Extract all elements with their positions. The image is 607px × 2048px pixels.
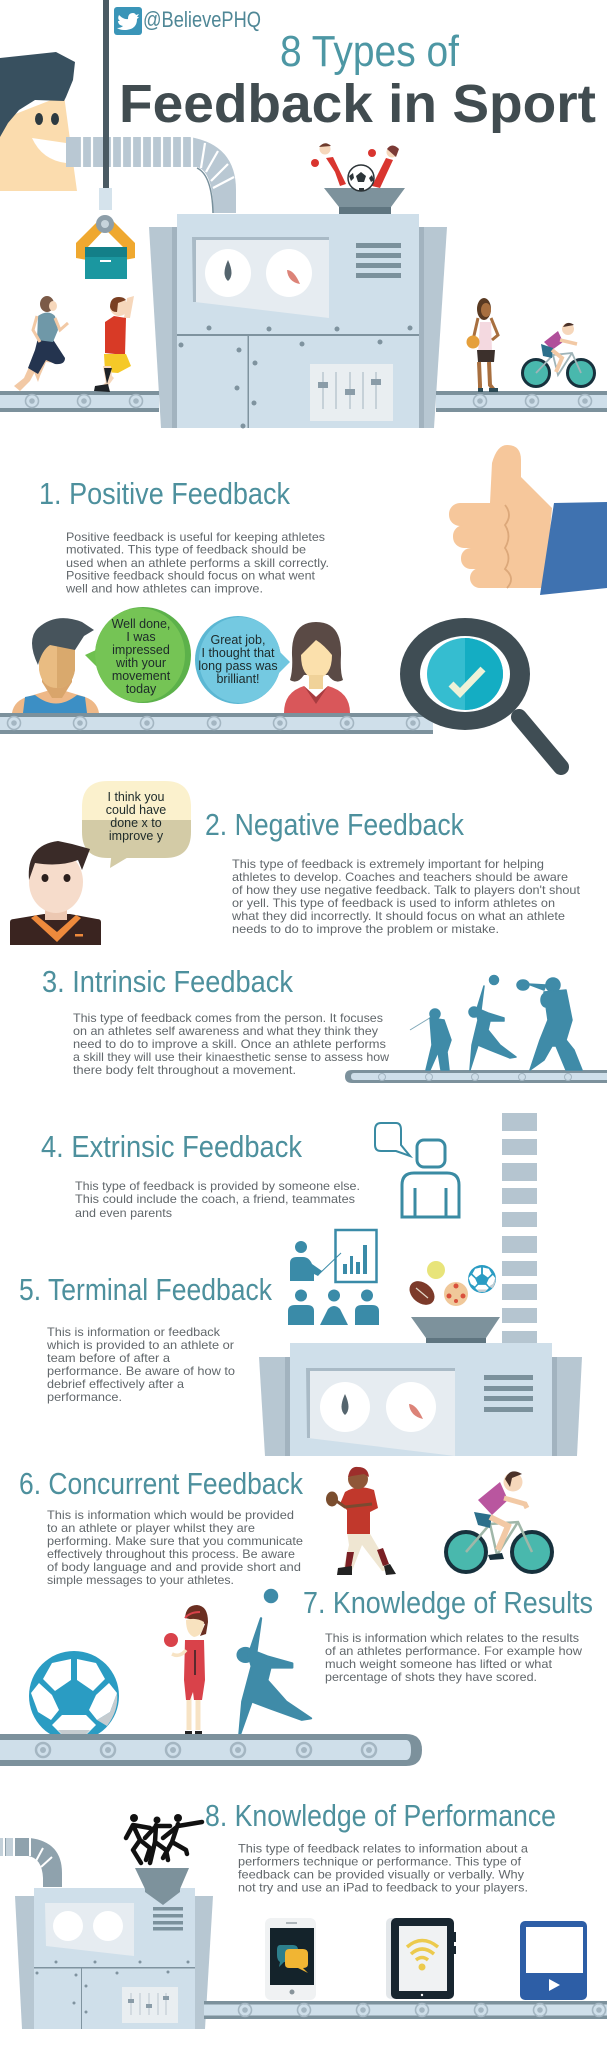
text: concurrent feedback: simple messages to your athletes. [47, 1573, 234, 1587]
text: positive feedback: well and how athletes can improve. [65, 582, 263, 596]
figure: girl with ball [164, 1605, 208, 1734]
icon: thumbs up [449, 445, 607, 595]
woman running [14, 296, 68, 391]
text: negative feedback [231, 857, 581, 936]
text: extrinsic feedback [75, 1179, 360, 1220]
icon: tablet with wifi [386, 1918, 456, 1999]
icon: smartphone [265, 1918, 316, 2000]
right conveyor belt [436, 391, 607, 412]
icon: person outline with speech bubble [375, 1123, 459, 1217]
silhouette: ball thrower [469, 976, 516, 1070]
icon: teacher presenting to class [288, 1230, 379, 1325]
silhouette: golfer [410, 1009, 451, 1070]
conveyor belt: positive feedback [0, 713, 433, 734]
text: concurrent feedback: This is information which would be provided [47, 1508, 294, 1522]
pole [103, 0, 109, 188]
text: terminal feedback [46, 1325, 235, 1404]
text: intrinsic feedback: there body felt throughout a movement. [73, 1063, 296, 1077]
speech bubble: well done: impressed [112, 643, 170, 657]
text: concurrent feedback: to an athlete or player whilst they are [47, 1521, 255, 1535]
silhouette: three black runners [126, 1814, 202, 1863]
face with smile [0, 52, 77, 191]
text: knowledge of performance: feedback can be provided visually or verbally. Why [238, 1868, 524, 1882]
silhouette: boxer [517, 978, 582, 1070]
text: terminal feedback: performance. [47, 1390, 122, 1404]
text: terminal feedback: team before of after a [47, 1351, 170, 1365]
text: positive feedback [65, 530, 329, 596]
speech bubble: great job: long pass was [198, 659, 278, 673]
speech bubble: great job: brilliant! [216, 672, 260, 686]
main machine [149, 214, 447, 428]
sports balls [405, 1261, 496, 1310]
conveyor belt: performance [204, 2001, 607, 2019]
text: extrinsic feedback: This could include the coach, a friend, teammates [75, 1192, 355, 1206]
speech bubble: well done: Well done, [112, 617, 170, 631]
text: negative feedback: what they did incorrectly. It should focus on what an athlete [231, 909, 565, 923]
hopper: performance machine [135, 1868, 189, 1905]
person: woman in red top [284, 622, 350, 713]
text: negative feedback: of how they use negative feedback. Talk to players don't shout [232, 883, 581, 897]
machine: performance [15, 1888, 213, 2029]
text: knowledge of performance: performers technique or performance. This type of [238, 1854, 522, 1868]
text: terminal feedback: which is provided to an athlete or [46, 1338, 234, 1352]
text: knowledge of results: This is information which relates to the results [325, 1631, 579, 1645]
figure: cyclist large [446, 1471, 552, 1572]
text: knowledge of results: much weight someone has lifted or what [325, 1657, 553, 1671]
text: concurrent feedback: performing. Make sure that you communicate [47, 1534, 303, 1548]
heading: 6. Concurrent Feedback: 6. Concurrent Feedback [19, 1466, 303, 1501]
hopper: terminal machine [411, 1317, 500, 1343]
heading: 5. Terminal Feedback: 5. Terminal Feedback [19, 1272, 272, 1307]
heading: 2. Negative Feedback: 2. Negative Feedback [205, 807, 464, 842]
speech bubble: negative feedback [82, 781, 191, 868]
text: extrinsic feedback: This type of feedback is provided by someone else. [75, 1179, 360, 1193]
text: terminal feedback: This is information or feedback [47, 1325, 221, 1339]
text: positive feedback: Positive feedback is useful for keeping athletes [66, 530, 325, 544]
speech bubble: great job [195, 616, 290, 704]
title: 8 Types of [280, 27, 460, 76]
speech bubble: negative feedback: improve y [109, 829, 164, 843]
text: knowledge of performance: This type of feedback relates to information about a [238, 1842, 528, 1856]
speech bubble: well done: movement [112, 669, 171, 683]
woman with basketball [466, 298, 498, 392]
speech bubble: well done: with your [115, 656, 166, 670]
text: knowledge of results: of an athletes performance. For example how [325, 1644, 582, 1658]
text: intrinsic feedback: need to do to improve a skill. Once an athlete performs [73, 1037, 386, 1051]
speech bubble: well done: today [126, 682, 157, 696]
speech bubble: negative feedback: done x to [110, 816, 162, 830]
heading: 1. Positive Feedback: 1. Positive Feedback [39, 476, 290, 511]
title: Feedback in Sport [119, 74, 596, 134]
cyclist [522, 323, 594, 386]
twitter handle [114, 7, 261, 35]
striped column [502, 1113, 537, 1343]
figure: american football player [326, 1467, 396, 1575]
person: man in blue tank [12, 618, 99, 713]
text: knowledge of results [325, 1631, 582, 1684]
text: positive feedback: used when an athlete performs a skill correctly. [66, 556, 329, 570]
left conveyor belt [0, 391, 159, 412]
text: knowledge of results: percentage of shots they have scored. [325, 1670, 537, 1684]
text: concurrent feedback: effectively throughout this process. Be aware [47, 1547, 295, 1561]
text: intrinsic feedback [73, 1011, 389, 1077]
text: knowledge of performance [238, 1842, 528, 1894]
icon: soccer ball [29, 1651, 119, 1741]
text: concurrent feedback: of body language and and provide short and [47, 1560, 301, 1574]
person: coach [10, 841, 101, 945]
heading: 4. Extrinsic Feedback: 4. Extrinsic Feedback [41, 1129, 302, 1164]
title [119, 27, 596, 134]
text: negative feedback: This type of feedback is extremely important for helping [232, 857, 544, 871]
text: intrinsic feedback: This type of feedback comes from the person. It focuses [73, 1011, 383, 1025]
conveyor belt: knowledge of results [0, 1734, 422, 1766]
speech bubble: great job: I thought that [202, 646, 275, 660]
text: negative feedback: athletes to develop. Coaches and teachers should be aware [232, 870, 568, 884]
speech bubble: great job: Great job, [211, 633, 265, 647]
heading: 3. Intrinsic Feedback: 3. Intrinsic Feedback [42, 964, 293, 999]
conveyor belt: intrinsic [345, 1070, 607, 1083]
tube: performance machine [0, 1838, 62, 1887]
text: negative feedback: needs to do to improve the problem or mistake. [232, 922, 499, 936]
text: knowledge of performance: not try and use an iPad to feedback to your players. [238, 1880, 528, 1894]
machine: terminal feedback [259, 1343, 582, 1456]
claw holding box [76, 188, 135, 279]
text: terminal feedback: debrief effectively after a [47, 1377, 184, 1391]
silhouette: ball thrower large [238, 1590, 311, 1737]
boy running [94, 296, 134, 392]
icon: magnifying glass with tick [400, 618, 561, 767]
heading: 8. Knowledge of Performance: 8. Knowledge of Performance [205, 1798, 556, 1833]
red players and football going into hopper [311, 143, 399, 191]
text: concurrent feedback [47, 1508, 303, 1587]
text: terminal feedback: performance. Be aware of how to [47, 1364, 235, 1378]
hopper [324, 188, 405, 214]
feedback tube [66, 137, 236, 213]
speech bubble: negative feedback: could have [106, 803, 166, 817]
icon: media player [520, 1921, 587, 2000]
text: positive feedback: Positive feedback should focus on what went [66, 568, 316, 582]
text: negative feedback: or yell. This type of feedback is used to inform athletes on [232, 896, 555, 910]
speech bubble: negative feedback: I think you [108, 790, 165, 804]
text: positive feedback: motivated. This type of feedback should be [66, 542, 306, 556]
speech bubble: well done: I was [126, 630, 156, 644]
text: intrinsic feedback: a skill they will use their kinaesthetic sense to assess how [73, 1050, 389, 1064]
twitter handle: @BelievePHQ [143, 7, 261, 32]
speech bubble: well done [85, 607, 191, 703]
text: extrinsic feedback: and even parents [75, 1206, 172, 1220]
text: intrinsic feedback: on an athletes self awareness and what they think they [73, 1024, 378, 1038]
